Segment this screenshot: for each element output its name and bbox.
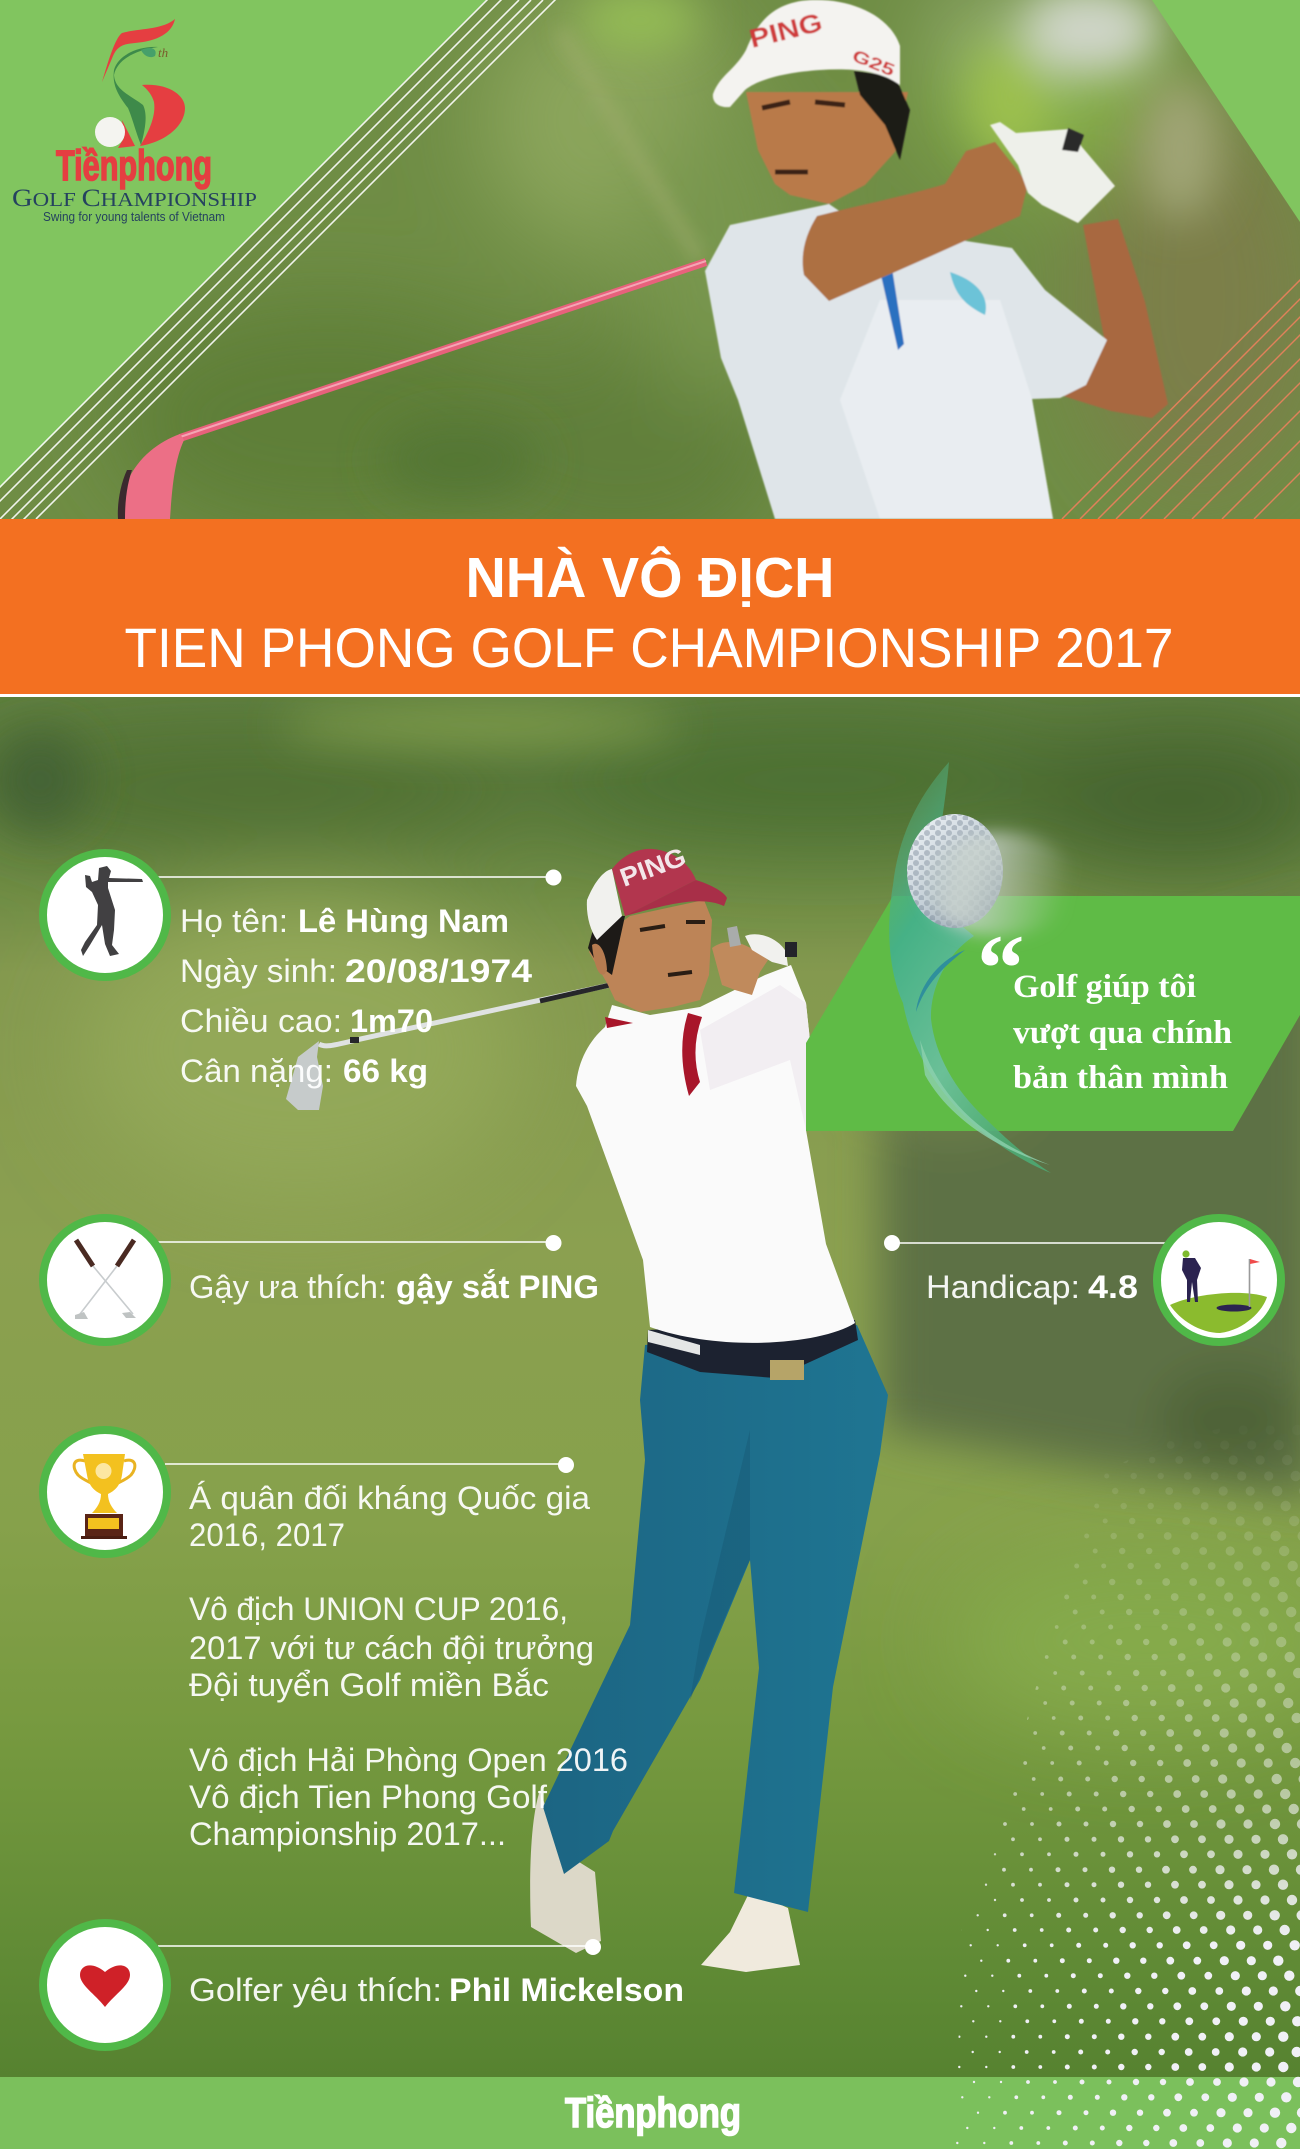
connector — [158, 1235, 562, 1251]
belt — [647, 1320, 858, 1378]
profile block: 1m70 — [350, 1003, 433, 1039]
profile block: 66 kg — [343, 1053, 428, 1089]
ball motion trail — [922, 832, 1078, 936]
halftone dots — [950, 1430, 1300, 2143]
cap lettering: PING — [746, 7, 825, 54]
falling golf ball quote callout: vượt qua chính — [1013, 1015, 1232, 1051]
achievements text: Championship 2017... — [189, 1816, 506, 1852]
main golfer club — [286, 985, 610, 1110]
favourite club block: gậy sắt PING — [396, 1269, 599, 1305]
5th mark: th — [158, 45, 168, 60]
title line 2: TIEN PHONG GOLF CHAMPIONSHIP 2017 — [124, 616, 1174, 679]
shirt — [705, 204, 1107, 519]
favourite club text: Gậy ưa thích: — [189, 1269, 387, 1305]
trousers — [543, 1325, 888, 1912]
connector — [884, 1235, 1168, 1251]
profile block: 20/08/1974 — [345, 953, 532, 989]
far arm — [1060, 219, 1168, 418]
achievements text: Vô địch UNION CUP 2016, — [189, 1591, 568, 1627]
favourite golfer block: Phil Mickelson — [449, 1972, 684, 2008]
weight: Cân nặng: — [180, 1053, 333, 1089]
profile block: Lê Hùng Nam — [298, 903, 509, 939]
orange diagonal lines — [1062, 270, 1300, 519]
eye brows and mouth — [640, 922, 705, 975]
quote text: Golf giúp tôi — [1013, 969, 1196, 1005]
golf ball — [907, 814, 1003, 928]
connector — [158, 1939, 601, 1955]
glove and grip — [745, 934, 788, 966]
connector dot — [546, 870, 562, 886]
quote mark: “ — [977, 915, 1024, 1021]
main golfer in white shirt and teal trousers — [530, 841, 888, 1972]
icon: crossed clubs — [43, 1218, 167, 1342]
ear and hair — [588, 915, 625, 975]
hands — [712, 942, 768, 995]
icon: golfer silhouette — [43, 853, 167, 977]
handicap text: Handicap: — [926, 1269, 1080, 1305]
achievements text: 2016, 2017 — [189, 1517, 345, 1553]
title line 1: NHÀ VÔ ĐỊCH — [466, 545, 834, 610]
icon: golfer on the green — [1157, 1218, 1281, 1342]
logo subtitle: GOLF CHAMPIONSHIP — [12, 185, 257, 212]
golfer in white shirt — [705, 0, 1168, 519]
golfer in white shirt: G25 — [850, 46, 897, 80]
glove — [990, 122, 1115, 223]
falling golf ball quote callout: bản thân mình — [1013, 1060, 1228, 1096]
logo wordmark: Tiềnphong — [56, 142, 212, 190]
white diagonal lines — [0, 0, 556, 521]
birth date: Ngày sinh: — [180, 953, 337, 989]
cap — [713, 0, 900, 107]
logo tagline: Swing for young talents of Vietnam — [43, 210, 225, 224]
footer logo: Tiềnphong — [565, 2089, 741, 2136]
neck and face — [589, 900, 712, 1012]
left green corner panel — [0, 0, 486, 488]
height: Chiều cao: — [180, 1003, 342, 1039]
achievements text: Vô địch Tien Phong Golf — [189, 1779, 547, 1815]
shirt body — [576, 965, 855, 1343]
callout panel — [806, 896, 1300, 1131]
achievements text: Á quân đối kháng Quốc gia — [189, 1480, 590, 1516]
favourite club block — [43, 1218, 599, 1342]
icon: heart — [43, 1923, 167, 2047]
achievements text: Đội tuyển Golf miền Bắc — [189, 1667, 549, 1703]
name: Họ tên: — [180, 903, 288, 939]
cap brim — [625, 880, 727, 916]
falling golf ball quote callout — [806, 762, 1300, 1173]
logo numeral five — [102, 19, 185, 148]
footer bar — [0, 2077, 1300, 2149]
icon: trophy — [43, 1430, 167, 1554]
favourite golfer block — [43, 1923, 684, 2047]
photo background: blurred foliage — [0, 0, 1300, 560]
profile block — [43, 853, 562, 1089]
eyes and mouth — [762, 102, 845, 172]
collar placket — [880, 268, 904, 350]
main photo background — [0, 697, 1300, 2078]
achievements text: 2017 với tư cách đội trưởng — [189, 1630, 594, 1666]
back shoe — [530, 1790, 601, 1953]
favourite golfer text: Golfer yêu thích: — [189, 1972, 442, 2008]
achievements text: Vô địch Hải Phòng Open 2016 — [189, 1742, 628, 1778]
pink driver club — [118, 261, 706, 519]
cap PING label: PING — [616, 841, 690, 893]
cap crown — [587, 869, 622, 940]
face — [746, 92, 908, 204]
handicap block — [884, 1218, 1281, 1342]
swoosh — [889, 762, 1051, 1173]
right green corner panel — [1152, 0, 1300, 222]
near forearm — [803, 142, 1028, 301]
orange title band — [0, 519, 1300, 694]
collar — [605, 1017, 633, 1028]
top photo: golfer follow-through — [0, 0, 1300, 560]
front shoe — [701, 1891, 800, 1972]
connector — [165, 1457, 574, 1473]
connector line — [158, 876, 550, 878]
achievements text — [189, 1480, 628, 1852]
logo golf ball — [95, 117, 125, 147]
handicap block: 4.8 — [1088, 1269, 1138, 1305]
tournament logo — [12, 19, 257, 224]
shirt logo — [950, 272, 986, 315]
sleeve cuff — [682, 1013, 702, 1096]
achievements block — [43, 1430, 628, 1852]
